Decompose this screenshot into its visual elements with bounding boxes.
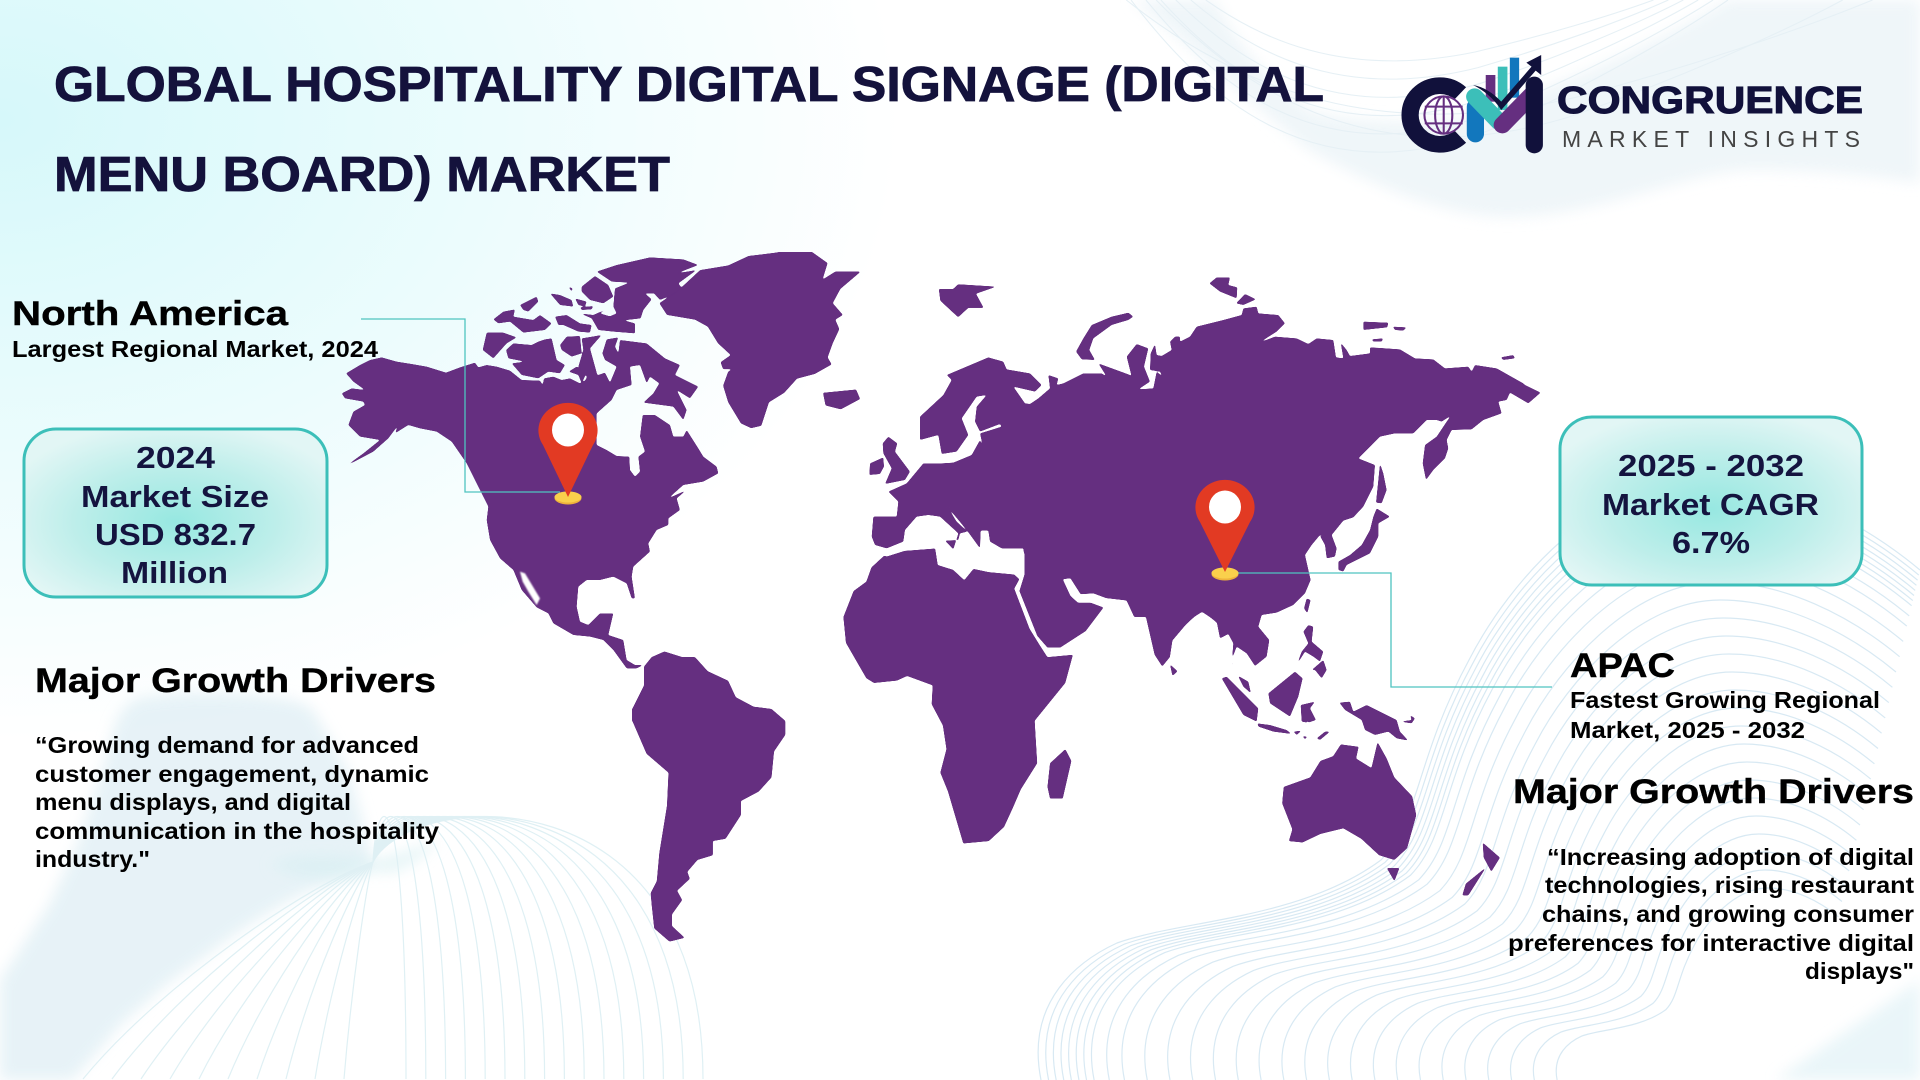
background wave: top right [1126,0,1920,217]
logo tagline: MARKET INSIGHTS [1562,126,1860,152]
region label: North America: Largest Regional Market, 2024 [12,336,378,362]
growth drivers: left: “Growing demand for advanced [35,732,419,758]
region label: APAC: APAC [1570,647,1675,685]
connector: APAC [1238,573,1552,687]
world map [342,252,1541,942]
stat box: 2024 market size: USD 832.7 [95,517,256,552]
stat box: 2025-2032 CAGR [1560,417,1862,585]
region label: North America: North America [12,295,289,333]
stat box: 2025-2032 CAGR: 2025 - 2032 [1618,448,1804,483]
background wave: bottom right [1038,480,1920,1080]
title [54,58,1324,202]
background wave: bottom left [0,693,703,1080]
map pin: APAC [1195,480,1255,580]
logo name: CONGRUENCE [1557,80,1863,122]
growth drivers: left: industry." [35,846,150,872]
growth drivers: right: technologies, rising restaurant [1545,872,1914,898]
stat box: 2024 market size: Market Size [81,479,269,514]
Canadian Arctic islands [483,257,698,383]
growth drivers: right: Major Growth Drivers [1513,773,1914,811]
North America mainland [342,337,718,668]
Greenland and South America [632,252,861,942]
logo: Congruence Market Insights [1410,55,1863,152]
growth drivers: left: Major Growth Drivers [35,662,436,700]
title: GLOBAL HOSPITALITY DIGITAL SIGNAGE (DIGITAL [54,58,1324,112]
growth drivers: left [35,662,439,872]
Arabia, India, Africa and Oceania [823,284,1500,895]
stat box: 2024 market size: 2024 [136,440,216,475]
region label: APAC: Market, 2025 - 2032 [1570,717,1805,743]
stat box: 2025-2032 CAGR: Market CAGR [1602,487,1819,522]
East and Southeast Asia [1180,430,1415,741]
stat box: 2025-2032 CAGR: 6.7% [1672,525,1750,560]
growth drivers: right [1508,773,1914,984]
Europe and west Asia [869,337,1180,553]
growth drivers: right: preferences for interactive digital [1508,930,1914,956]
region label: APAC: Fastest Growing Regional [1570,687,1880,713]
growth drivers: left: menu displays, and digital [35,789,351,815]
region label: APAC [1570,647,1880,743]
growth drivers: right: displays" [1805,958,1914,984]
growth drivers: left: communication in the hospitality [35,818,439,844]
growth drivers: right: “Increasing adoption of digital [1547,844,1914,870]
north and far east Russia [1076,277,1541,480]
growth drivers: right: chains, and growing consumer [1542,901,1914,927]
map pin: North America [538,403,598,504]
stat box: 2024 market size [24,429,327,597]
stat box: 2024 market size: Million [121,555,228,590]
title: MENU BOARD) MARKET [54,148,670,202]
region label: North America [12,295,378,362]
growth drivers: left: customer engagement, dynamic [35,761,429,787]
logo mark [1410,55,1541,145]
connector: North America [361,319,560,492]
